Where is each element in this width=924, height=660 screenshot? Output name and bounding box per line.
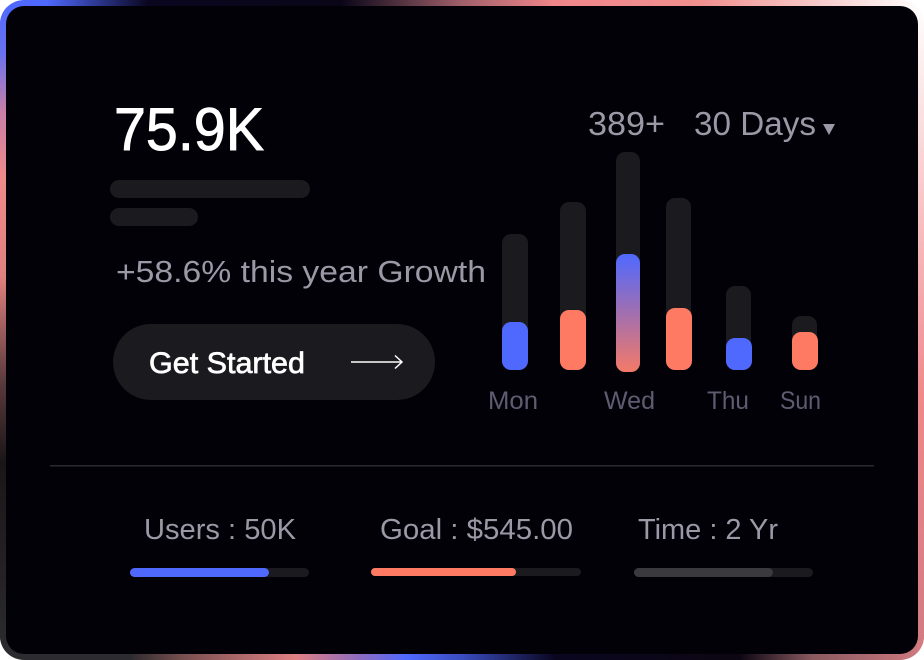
bar: Sun — [792, 316, 818, 370]
button: get started: Get Started — [149, 347, 305, 380]
placeholder line: short — [110, 208, 198, 226]
bar chart — [488, 152, 821, 415]
progress bar: time — [634, 568, 813, 577]
headline metric: 75.9K — [114, 96, 264, 163]
axis label: Sun: Sun — [780, 387, 821, 415]
stat: goal — [371, 514, 581, 576]
growth text: +58.6% this year Growth — [116, 254, 486, 289]
progress bar: users — [130, 568, 309, 577]
axis label: Mon: Mon — [488, 387, 538, 415]
bar: Thu — [726, 286, 752, 370]
axis label: Wed: Wed — [604, 387, 655, 415]
stat: goal: Goal : $545.00 — [380, 514, 573, 546]
axis label: Thu: Thu — [707, 387, 749, 415]
progress bar: goal — [371, 568, 581, 576]
bar: Wed — [616, 152, 640, 372]
stat: users — [130, 514, 309, 577]
button: get started — [113, 324, 435, 400]
count label: 389+ — [588, 105, 665, 142]
stat: users: Users : 50K — [144, 514, 297, 546]
bar: Tue — [560, 202, 586, 370]
bar: Mon — [502, 234, 528, 370]
stat: time — [634, 514, 813, 577]
icon: dropdown triangle — [823, 124, 835, 135]
placeholder line: long — [110, 180, 310, 198]
stat: time: Time : 2 Yr — [638, 514, 778, 546]
icon: arrow — [351, 356, 402, 368]
period selector: 30 Days — [694, 105, 816, 142]
bar: Wed second — [666, 198, 692, 370]
